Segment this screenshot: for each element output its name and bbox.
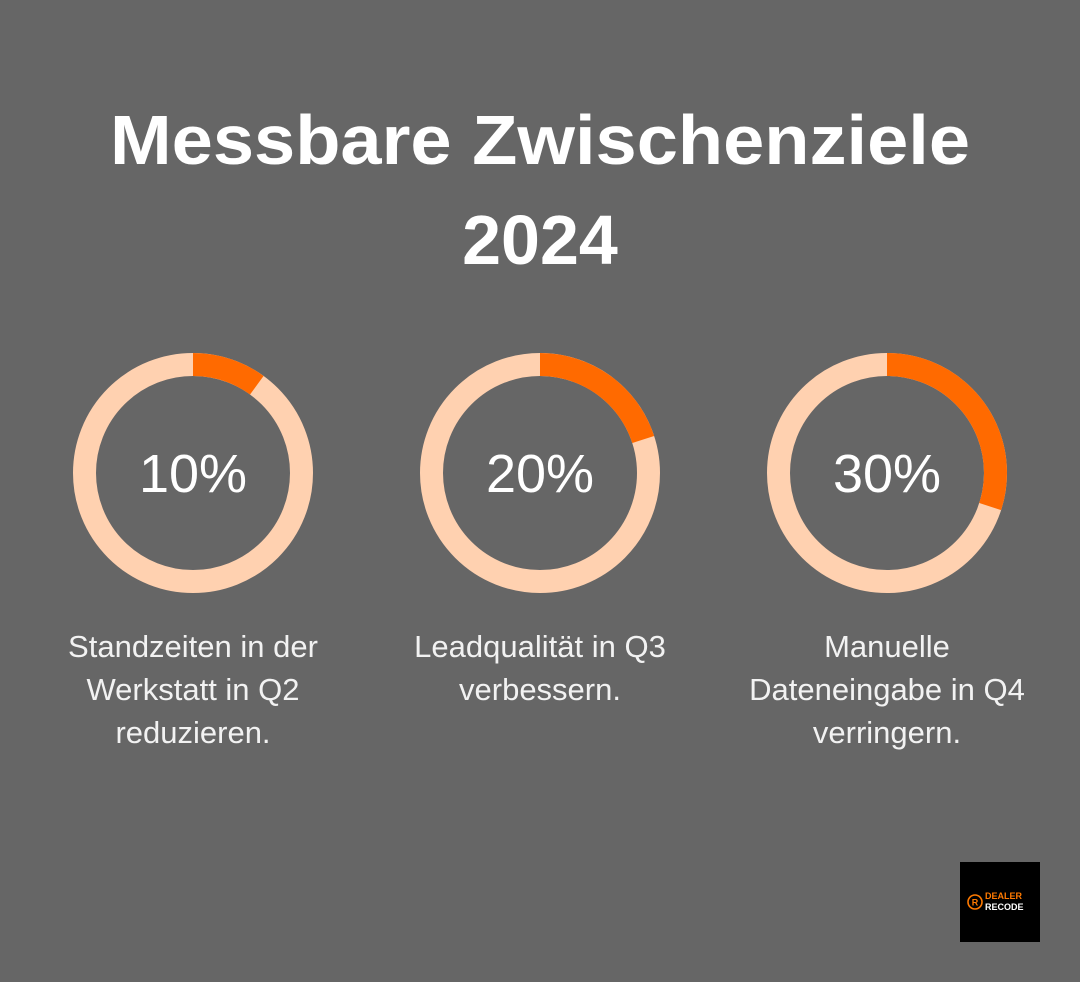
chart: ring 20%: [432, 364, 648, 582]
text block: label 3: [749, 629, 1025, 750]
text block: label 3: verringern.: [813, 715, 961, 750]
chart: ring 10%: [84, 364, 302, 582]
text block: label 1: Werkstatt in Q2: [86, 672, 300, 707]
chart: ring 20%: 20%: [486, 444, 594, 504]
title: [110, 101, 970, 279]
title: 2024: [462, 201, 618, 279]
logo: Dealer Recode: RECODE: [985, 902, 1024, 912]
text block: label 1: Standzeiten in der: [68, 629, 318, 664]
chart: ring 30%: 30%: [833, 444, 941, 504]
logo: Dealer Recode: [960, 862, 1040, 942]
chart: ring 10%: 10%: [139, 444, 247, 504]
text block: label 1: [68, 629, 318, 750]
text block: label 3: Manuelle: [824, 629, 950, 664]
text block: label 1: reduzieren.: [115, 715, 271, 750]
chart: ring 30%: [778, 364, 996, 582]
text block: label 3: Dateneingabe in Q4: [749, 672, 1025, 707]
logo: Dealer Recode: R: [972, 898, 979, 908]
text block: label 2: Leadqualität in Q3: [414, 629, 666, 664]
logo: Dealer Recode: DEALER: [985, 891, 1023, 901]
title: Messbare Zwischenziele: [110, 101, 970, 179]
text block: label 2: verbessern.: [459, 672, 621, 707]
text block: label 2: [414, 629, 666, 707]
